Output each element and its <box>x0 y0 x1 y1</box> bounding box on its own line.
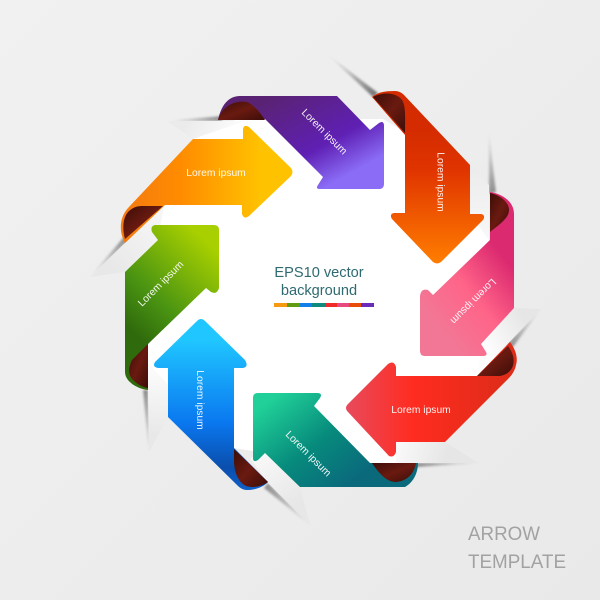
fold: red-orange <box>373 94 405 133</box>
template title <box>468 524 566 573</box>
heading: background <box>281 283 357 299</box>
arrow: blue <box>154 319 268 490</box>
label: purple: Lorem ipsum <box>299 107 349 157</box>
fold: teal <box>372 463 416 482</box>
fold: blue <box>234 449 268 487</box>
paper flaps <box>90 121 541 525</box>
arrow: red <box>346 342 517 456</box>
template title: TEMPLATE <box>468 552 566 573</box>
fold: green <box>129 344 148 388</box>
arrow: pink <box>420 192 514 356</box>
arrow: red-orange <box>372 91 484 264</box>
arrow: purple <box>218 96 384 189</box>
label: blue: Lorem ipsum <box>194 370 205 430</box>
label: orange: Lorem ipsum <box>186 168 246 179</box>
arrow: green <box>125 225 219 390</box>
template title: ARROW <box>468 524 540 545</box>
white centre panel <box>130 119 514 463</box>
fold: orange <box>123 206 163 239</box>
label: red: Lorem ipsum <box>391 405 451 416</box>
label: teal: Lorem ipsum <box>283 429 333 479</box>
fold: pink <box>490 193 509 232</box>
arrow: orange <box>121 126 293 243</box>
heading <box>274 265 364 299</box>
rainbow bar <box>274 303 374 307</box>
label: red-orange: Lorem ipsum <box>434 152 446 212</box>
arrow: teal <box>253 393 418 487</box>
label: green: Lorem ipsum <box>136 259 186 309</box>
paper cut shadows <box>90 54 541 525</box>
fold: red <box>477 346 514 376</box>
label: pink: Lorem ipsum <box>448 276 498 326</box>
fold: purple <box>218 102 265 120</box>
heading: EPS10 vector <box>274 265 364 281</box>
